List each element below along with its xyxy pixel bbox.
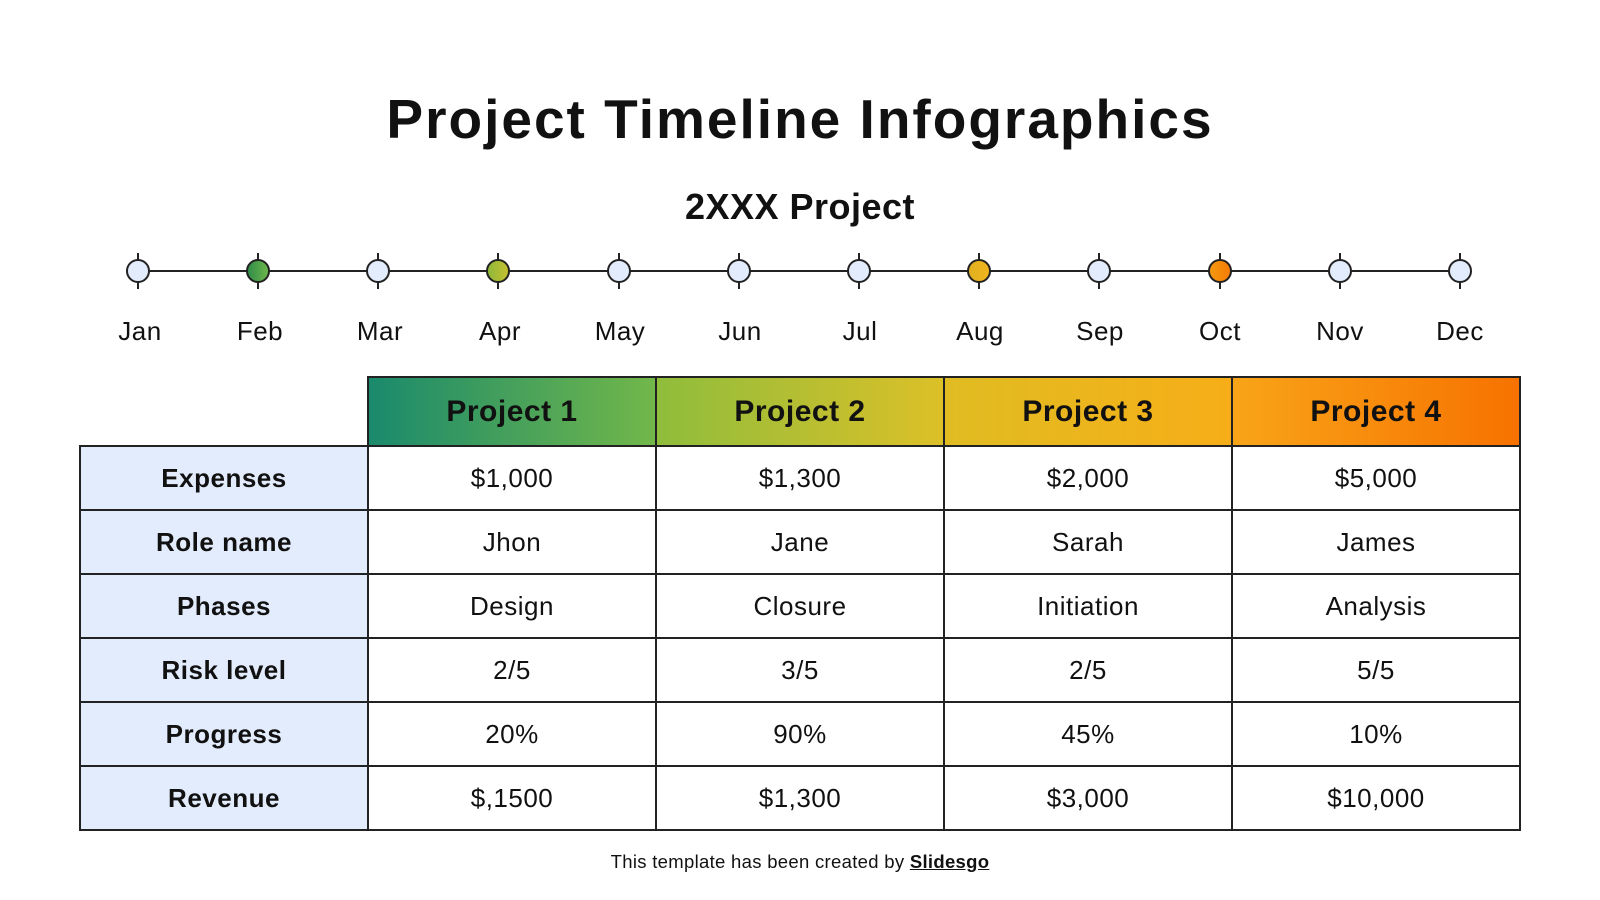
title: Project Timeline Infographics (386, 88, 1214, 150)
data table: Project 4 (1310, 394, 1442, 428)
month labels: Oct (1199, 316, 1241, 346)
data table: 45% (1061, 718, 1115, 748)
data table: Role name (156, 526, 292, 556)
data table: $10,000 (1327, 782, 1425, 812)
month labels: Jun (718, 316, 762, 346)
data table: Risk level (162, 654, 286, 684)
data table: Design (470, 590, 554, 620)
data table: Sarah (1052, 526, 1124, 556)
data table: Closure (753, 590, 847, 620)
data table: $1,300 (759, 462, 841, 492)
month labels: May (595, 316, 645, 346)
data table: $1,300 (759, 782, 841, 812)
data table: Jhon (483, 526, 541, 556)
data table: $,1500 (471, 782, 553, 812)
data table: $1,000 (471, 462, 553, 492)
data table: Initiation (1037, 590, 1139, 620)
data table: Project 1 (446, 394, 578, 428)
month labels (118, 316, 1484, 346)
footer credit: This template has been created by Slidesgo (611, 851, 989, 872)
data table: Expenses (161, 462, 287, 492)
data table: $5,000 (1335, 462, 1417, 492)
data table: 5/5 (1357, 654, 1395, 684)
data table: Phases (177, 590, 271, 620)
data table: Project 3 (1022, 394, 1154, 428)
data table: 10% (1349, 718, 1403, 748)
data table: $3,000 (1047, 782, 1129, 812)
data table: 2/5 (1069, 654, 1107, 684)
month labels: Aug (956, 316, 1004, 346)
subtitle: 2XXX Project (685, 186, 915, 227)
timeline (126, 253, 1472, 289)
month labels: Feb (237, 316, 283, 346)
data table: 2/5 (493, 654, 531, 684)
data table: 3/5 (781, 654, 819, 684)
month labels: Jan (118, 316, 162, 346)
month labels: Apr (479, 316, 521, 346)
month labels: Nov (1316, 316, 1364, 346)
data table: 90% (773, 718, 827, 748)
data table: James (1336, 526, 1416, 556)
data table (79, 376, 1521, 831)
month labels: Sep (1076, 316, 1124, 346)
data table: Analysis (1326, 590, 1426, 620)
data table: Project 2 (734, 394, 866, 428)
data table: Revenue (168, 782, 280, 812)
month labels: Mar (357, 316, 403, 346)
month labels: Jul (843, 316, 877, 346)
data table: Jane (771, 526, 829, 556)
data table: 20% (485, 718, 539, 748)
month labels: Dec (1436, 316, 1484, 346)
data table: $2,000 (1047, 462, 1129, 492)
data table: Progress (166, 718, 282, 748)
